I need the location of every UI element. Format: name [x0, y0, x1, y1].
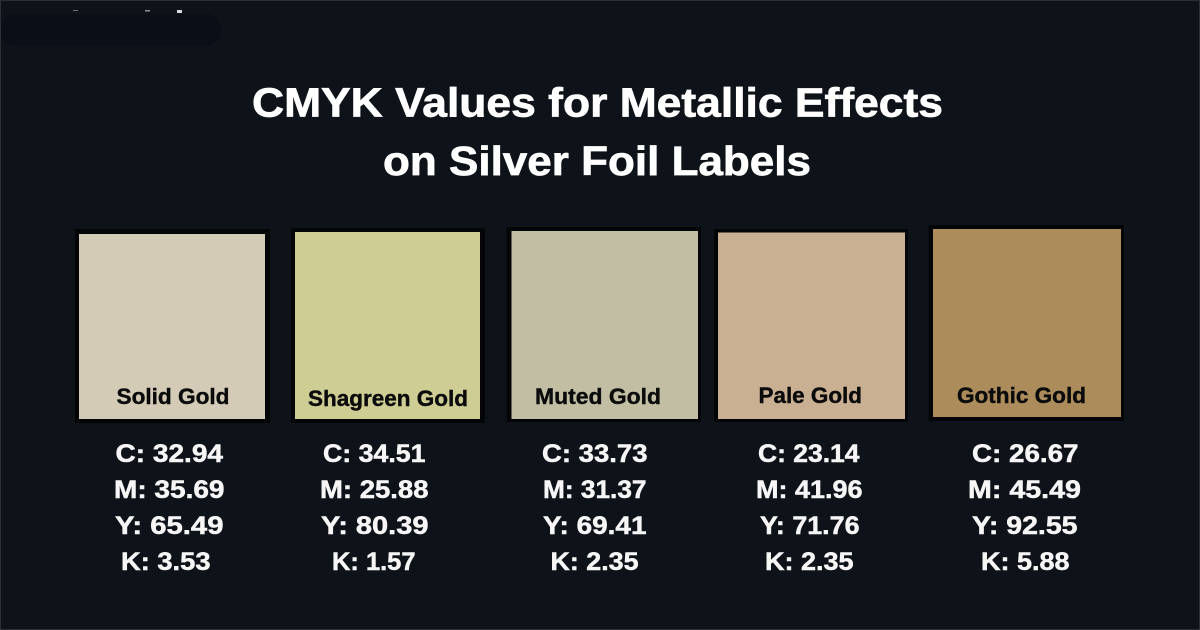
values: solid gold	[114, 440, 224, 576]
label: shagreen gold: Shagreen Gold	[308, 386, 468, 411]
values: muted gold	[542, 440, 648, 576]
values: muted gold: K: 2.35	[550, 548, 639, 576]
values: solid gold: K: 3.53	[121, 548, 210, 576]
values: pale gold	[756, 440, 862, 576]
panel: muted gold	[506, 227, 701, 422]
label: pale gold: Pale Gold	[758, 383, 862, 408]
panel: gothic gold	[928, 225, 1124, 421]
values: muted gold: Y: 69.41	[543, 512, 647, 540]
values: gothic gold: M: 45.49	[968, 476, 1081, 504]
values: gothic gold	[968, 440, 1081, 576]
values: gothic gold: K: 5.88	[981, 548, 1070, 576]
values: pale gold: Y: 71.76	[760, 512, 860, 540]
panel: pale gold	[714, 229, 908, 422]
label: gothic gold: Gothic Gold	[957, 383, 1086, 408]
values: solid gold: Y: 65.49	[115, 512, 224, 540]
title: on Silver Foil Labels	[383, 138, 811, 184]
values: muted gold: C: 33.73	[542, 440, 648, 468]
values: shagreen gold: C: 34.51	[323, 440, 426, 468]
label: solid gold: Solid Gold	[116, 384, 230, 409]
dark patch top left	[1, 14, 221, 46]
title	[252, 80, 943, 184]
values: shagreen gold: Y: 80.39	[321, 512, 428, 540]
label: muted gold: Muted Gold	[535, 384, 661, 409]
values: pale gold: M: 41.96	[756, 476, 862, 504]
values: shagreen gold	[320, 440, 429, 576]
values: pale gold: C: 23.14	[758, 440, 860, 468]
values: shagreen gold: K: 1.57	[332, 548, 416, 576]
values: pale gold: K: 2.35	[765, 548, 854, 576]
residual specks top left	[73, 10, 182, 13]
title: CMYK Values for Metallic Effects	[252, 80, 943, 126]
values: solid gold: M: 35.69	[114, 476, 224, 504]
values: gothic gold: Y: 92.55	[972, 512, 1078, 540]
values: shagreen gold: M: 25.88	[320, 476, 429, 504]
panel: solid gold	[75, 229, 270, 423]
values: gothic gold: C: 26.67	[972, 440, 1078, 468]
values: muted gold: M: 31.37	[543, 476, 646, 504]
panel: shagreen gold	[291, 228, 485, 423]
values: solid gold: C: 32.94	[116, 440, 223, 468]
